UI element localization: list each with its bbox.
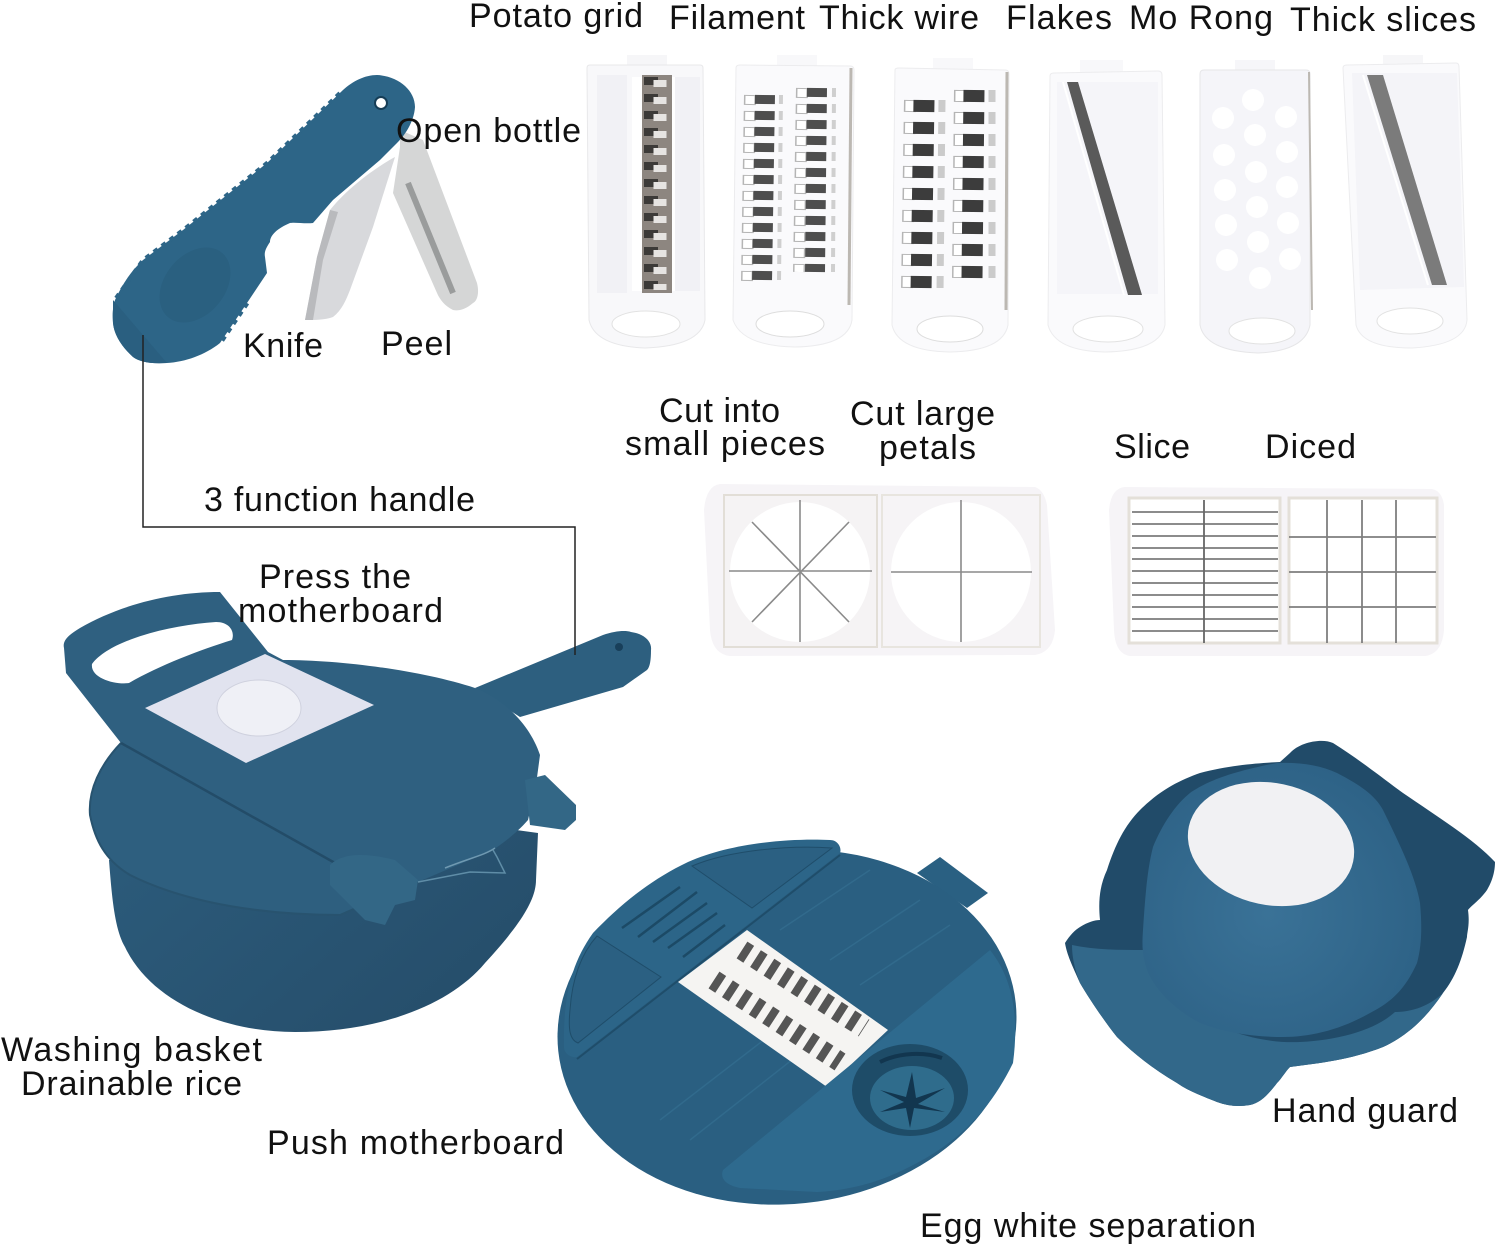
- label: press the motherboard: [238, 558, 443, 630]
- label: open bottle: Open bottle: [396, 112, 581, 150]
- cutter: small pieces and large petals: [704, 484, 1055, 656]
- blade labels: Mo Rong: [1129, 0, 1273, 37]
- lower cutter labels: small pieces: [625, 425, 825, 463]
- lower cutter labels: Cut into: [659, 392, 780, 430]
- callout line: 3 function handle: [143, 335, 575, 655]
- icon: three function handle: [113, 75, 478, 363]
- blade: thick wire: [892, 58, 1009, 352]
- cutter: slice and diced: [1109, 487, 1444, 656]
- blade labels: Filament: [669, 0, 806, 37]
- lower cutter labels: Cut large: [850, 395, 995, 433]
- blade: thick slices: [1343, 55, 1467, 348]
- blade labels: Flakes: [1006, 0, 1112, 37]
- icon: washing basket with motherboard: [64, 592, 651, 1032]
- blade labels: [469, 0, 1476, 39]
- lower cutter labels: Slice: [1114, 428, 1190, 466]
- label: peel: Peel: [381, 325, 452, 363]
- blade: mo rong: [1200, 60, 1312, 353]
- lower cutter labels: [625, 392, 1356, 467]
- label: press the motherboard: motherboard: [238, 592, 443, 630]
- label: washing basket drainable rice: Washing basket: [1, 1031, 263, 1069]
- blade: flakes: [1048, 60, 1165, 352]
- blade labels: Thick wire: [819, 0, 979, 37]
- blade: potato grid: [587, 55, 705, 348]
- label: knife: Knife: [243, 327, 323, 365]
- label: washing basket drainable rice: Drainable rice: [21, 1065, 242, 1103]
- lower cutter labels: petals: [879, 429, 976, 467]
- label: 3 function handle: 3 function handle: [204, 481, 475, 519]
- label: washing basket drainable rice: [1, 1031, 263, 1103]
- blade labels: Thick slices: [1290, 1, 1476, 39]
- label: hand guard: Hand guard: [1272, 1092, 1458, 1130]
- label: egg white separation: Egg white separation: [920, 1207, 1256, 1245]
- label: press the motherboard: Press the: [259, 558, 411, 596]
- icon: hand guard: [1065, 741, 1495, 1106]
- icon: push motherboard disk: [540, 827, 1034, 1227]
- label: push motherboard: Push motherboard: [267, 1124, 564, 1162]
- lower cutter labels: Diced: [1265, 428, 1356, 466]
- blade: filament: [733, 55, 854, 347]
